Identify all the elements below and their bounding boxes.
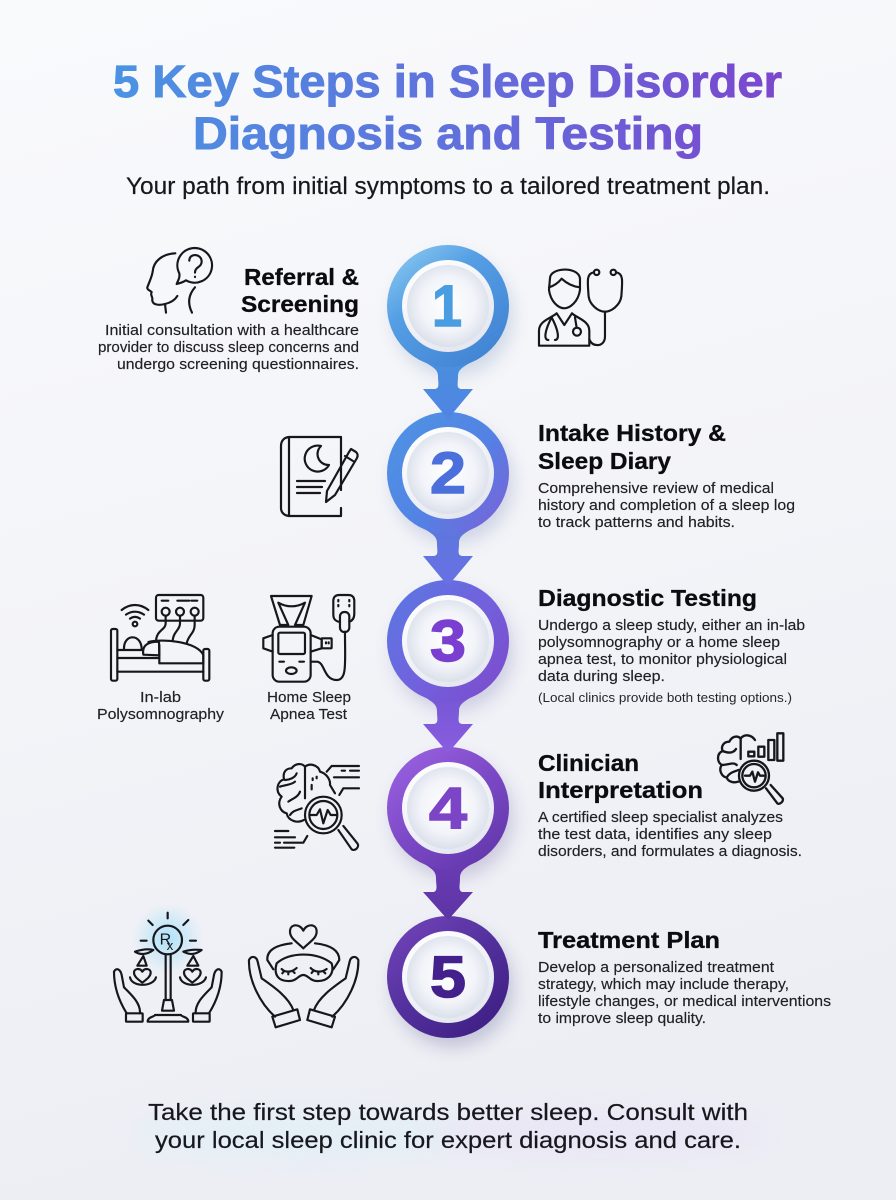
description: step 2: Comprehensive review of medical [538,480,774,497]
title: 5 Key Steps in Sleep Disorder [113,56,782,107]
description: step 4: disorders, and formulates a diagnosis. [538,843,802,860]
icon: prescription scale held by hands: R [160,932,171,949]
heading: diagnostic testing: Diagnostic Testing [538,585,757,611]
panel: step 4 clinician interpretation [275,733,802,860]
subtitle: Your path from initial symptoms to a tailored treatment plan. [126,173,770,200]
step node 1 with arrow: 1 [432,274,462,339]
label: in-lab polysomnography: In-lab [140,689,181,706]
description: step 5: Develop a personalized treatment [538,959,775,976]
icon: head with question bubble [147,248,212,313]
description: step 5: strategy, which may include therapy, [538,976,789,993]
heading: clinician interpretation: Clinician [538,750,639,776]
description: step 1: provider to discuss sleep concerns and [98,339,359,356]
panel: step 3 diagnostic testing [97,585,805,723]
icon: in-lab bed with monitor [111,595,209,681]
description: step 2: to track patterns and habits. [538,514,735,531]
timeline [387,245,513,1047]
label: home sleep apnea test: Home Sleep [267,689,351,706]
icon: doctor with stethoscope [539,270,622,346]
step node 1 with arrow [387,245,513,419]
heading: clinician interpretation: Interpretation [538,777,703,803]
description: step 1: Initial consultation with a healthcare [105,322,359,339]
heading: intake history: Intake History & [538,420,726,446]
description: step 3: polysomnography or a home sleep [538,634,780,651]
heading: referral and screening: Referral & [244,264,359,290]
panel: step 1 referral and screening [98,248,622,373]
heading: intake history [538,420,726,474]
description: step 5: lifestyle changes, or medical interventions [538,993,831,1010]
panel: step 5 treatment plan [114,903,831,1027]
step node 3 with arrow: 3 [430,609,466,674]
label: in-lab polysomnography [97,689,225,723]
footer call to action [130,1099,770,1156]
description: step 2: history and completion of a sleep log [538,497,795,514]
icon: home sleep apnea device [263,595,354,682]
title [113,56,782,159]
icon: brain with magnifier and bar chart [718,733,783,804]
footer call to action: Take the first step towards better sleep. Consult with [148,1099,748,1125]
step node 5 [387,916,513,1047]
description: step 2 [538,480,795,531]
description: step 1: undergo screening questionnaires. [117,356,359,373]
description: step 4: the test data, identifies any sleep [538,826,772,843]
label: in-lab polysomnography: Polysomnography [97,706,225,723]
step node 3 with arrow [387,580,513,753]
title: Diagnosis and Testing [193,108,703,159]
note: local clinics: (Local clinics provide both testing options.) [538,691,792,705]
icon: sleep diary book with pen [281,437,358,516]
description: step 3 [538,617,805,685]
step node 4 with arrow: 4 [429,776,467,841]
description: step 5 [538,959,831,1027]
description: step 1 [98,322,359,373]
description: step 4: A certified sleep specialist analyzes [538,809,783,826]
icon: prescription scale held by hands [114,903,222,1022]
description: step 3: Undergo a sleep study, either an in-lab [538,617,805,634]
description: step 3: apnea test, to monitor physiological [538,651,787,668]
heading: referral and screening: Screening [241,291,359,317]
footer call to action: your local sleep clinic for expert diagnosis and care. [155,1127,741,1153]
step node 2 with arrow: 2 [430,441,466,506]
step node 5: 5 [430,945,466,1010]
heading: referral and screening [241,264,359,317]
label: home sleep apnea test [267,689,351,723]
icon: brain with magnifier and notes [275,764,359,850]
description: step 3: data during sleep. [538,668,665,685]
description: step 5: to improve sleep quality. [538,1010,706,1027]
step node 2 with arrow [387,412,513,586]
panel: step 2 intake history and sleep diary [281,420,795,531]
icon: sleep mask held by hands [249,925,358,1027]
description: step 4 [538,809,802,860]
step node 4 with arrow [387,747,513,920]
icon: prescription scale held by hands: x [167,938,174,953]
label: home sleep apnea test: Apnea Test [270,706,348,723]
heading: intake history: Sleep Diary [538,448,671,474]
heading: treatment plan: Treatment Plan [538,927,720,953]
heading: clinician interpretation [538,750,703,803]
